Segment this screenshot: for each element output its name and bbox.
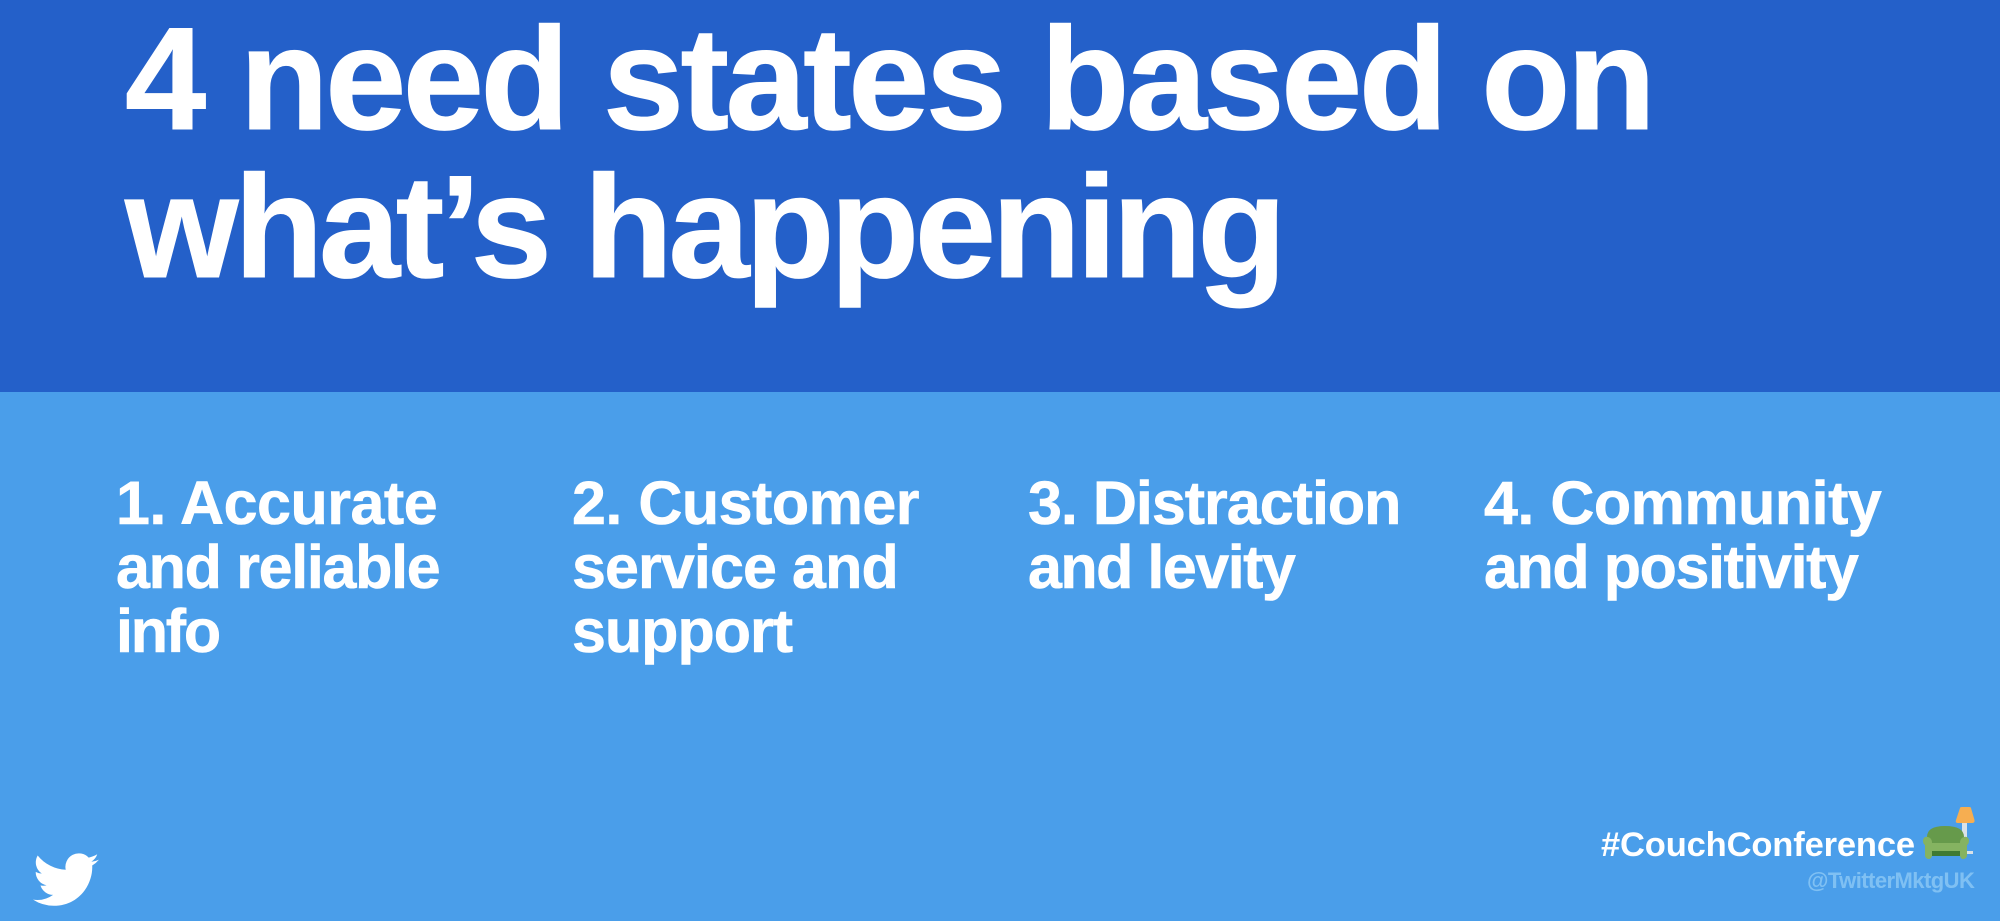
need state 4: and positivity bbox=[1484, 533, 1858, 601]
need state 1: and reliable bbox=[116, 533, 439, 601]
title bbox=[124, 0, 1652, 308]
need state 1: info bbox=[116, 597, 219, 665]
need state 2: service and bbox=[572, 533, 898, 601]
need state 2 bbox=[572, 469, 919, 665]
need state 3: and levity bbox=[1028, 533, 1294, 601]
need state 2: 2. Customer bbox=[572, 469, 919, 537]
need state 1: 1. Accurate bbox=[116, 469, 437, 537]
hashtag: #CouchConference bbox=[1601, 826, 1915, 864]
icon: twitter bird bbox=[33, 853, 99, 906]
need state 4 bbox=[1484, 469, 1882, 601]
need state 2: support bbox=[572, 597, 792, 665]
header band bbox=[0, 0, 2000, 392]
need state 3 bbox=[1028, 469, 1400, 601]
icon: couch and lamp bbox=[1923, 807, 1975, 859]
need state 3: 3. Distraction bbox=[1028, 469, 1400, 537]
need state 1 bbox=[116, 469, 439, 665]
title: what’s happening bbox=[125, 145, 1282, 308]
title: 4 need states based on bbox=[125, 0, 1652, 160]
need state 4: 4. Community bbox=[1484, 469, 1881, 537]
handle: @TwitterMktgUK bbox=[1807, 868, 1974, 893]
